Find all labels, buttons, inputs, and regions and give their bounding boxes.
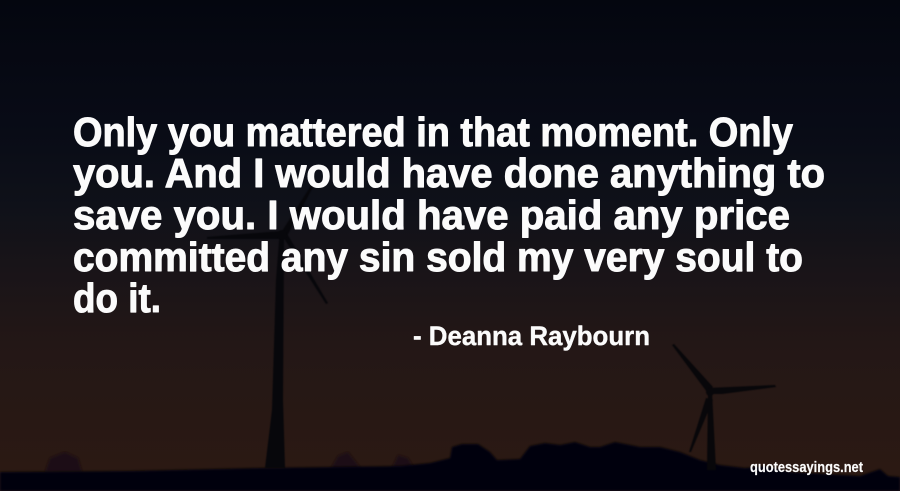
quote text: you. And I would have done anything to xyxy=(73,150,825,196)
quote text: Only you mattered in that moment. Only xyxy=(73,109,793,155)
icon: large wind turbine xyxy=(207,184,328,468)
watermark: quotessayings.net xyxy=(750,459,863,476)
quote text xyxy=(73,109,825,321)
quote text: save you. I would have paid any price xyxy=(73,192,790,238)
icon: small wind turbine xyxy=(672,344,776,470)
faint distant trees xyxy=(45,452,414,472)
author attribution: - Deanna Raybourn xyxy=(413,321,650,351)
quote text: committed any sin sold my very soul to xyxy=(73,234,803,280)
ground and treeline silhouette xyxy=(0,442,900,491)
quote text: do it. xyxy=(73,275,161,321)
